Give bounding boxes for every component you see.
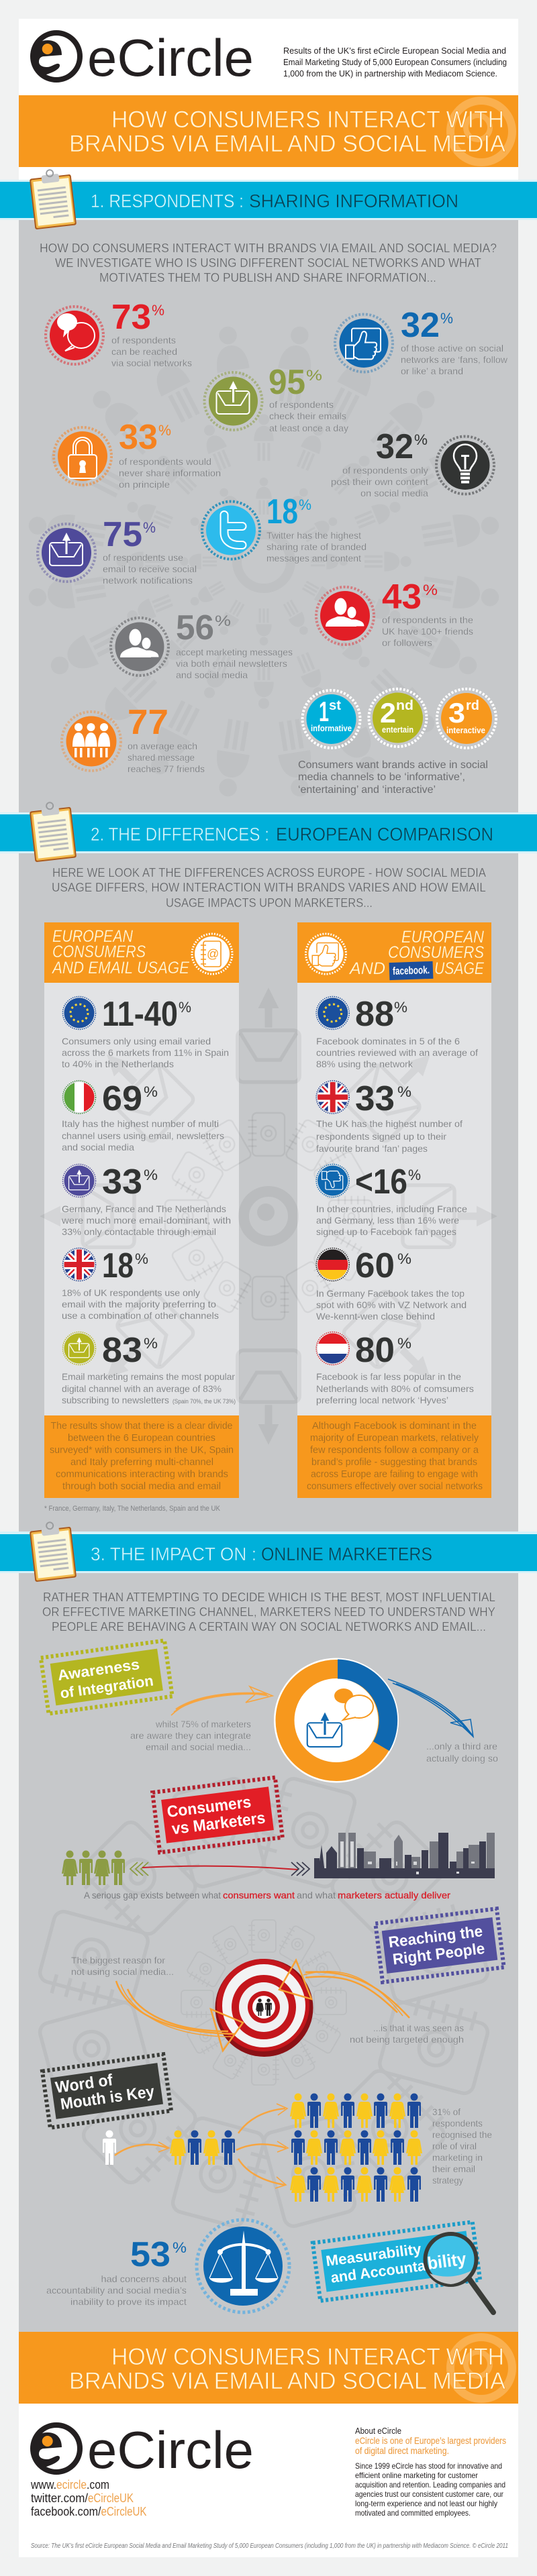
row: 88%	[316, 995, 478, 1069]
section band 3: impact	[0, 1520, 537, 1582]
ranking caption: Consumers want brands active in social	[298, 759, 488, 771]
conclusion box: email: and Italy preferring multi-channel	[70, 1456, 213, 1468]
row: 60% Germany: In Germany Facebook takes the top	[316, 1288, 465, 1299]
logo: eCircle	[87, 28, 254, 87]
title banner: HOW CONSUMERS INTERACT WITH	[111, 107, 504, 133]
target	[215, 1959, 313, 2057]
second-degree crowd row 3	[290, 2167, 421, 2202]
stat: 43% have 100+ friends: 43	[382, 578, 422, 616]
column header: email usage: EUROPEAN	[52, 927, 134, 946]
column header: facebook usage: CONSUMERS	[388, 943, 484, 962]
study description: Results of the UK’s first eCircle European Social Media and	[283, 46, 506, 56]
text: whilst 75% of marketers	[130, 1719, 251, 1752]
title banner: BRANDS VIA EMAIL AND SOCIAL MEDIA	[69, 131, 506, 157]
stat: 33% never share information: never share information	[119, 468, 221, 478]
row: 33% email only: Germany, France and The Netherlands	[62, 1203, 226, 1214]
arrows to wider groups	[236, 2104, 288, 2188]
conclusion box: facebook: Although Facebook is dominant in the	[312, 1420, 477, 1432]
row: 88%: %	[394, 999, 407, 1016]
row: 18% UK	[62, 1246, 219, 1321]
rank 3rd interactive: interactive	[446, 725, 485, 735]
gap arrow between consumers and marketers	[130, 1862, 309, 1876]
stat: 33% never share information: of respondents would	[119, 456, 211, 467]
web links	[30, 2478, 146, 2518]
arrow to first group	[115, 2142, 169, 2155]
stat: 56% accept marketing messages	[111, 608, 293, 680]
stat: 95% check email daily: at least once a day	[269, 423, 348, 433]
ranking caption: media channels to be ‘informative’,	[298, 771, 465, 783]
row: 80% Netherlands: preferring local network ‘Hyves’	[316, 1395, 448, 1405]
stat: 73% reachable via social networks: via social networks	[111, 358, 192, 368]
row: 69% Italy: %	[144, 1083, 158, 1100]
section band 3: impact: ONLINE MARKETERS	[261, 1544, 432, 1564]
section band 3: impact: 3. THE IMPACT ON :	[91, 1544, 256, 1564]
row: 33% UK: favourite brand ‘fan’ pages	[316, 1143, 428, 1154]
row: 11-40%: Consumers only using email varied	[62, 1036, 211, 1046]
panel: impact on online marketers	[19, 1573, 518, 2332]
row: 80% Netherlands: 80	[355, 1331, 395, 1370]
panel: differences, European comparison	[19, 853, 518, 1532]
stat: 95% check email daily: %	[306, 367, 322, 384]
web links: eCircleUK	[101, 2505, 146, 2518]
closing banner	[19, 2332, 518, 2404]
row: less than 16%	[316, 1163, 467, 1237]
rank 2nd entertain: nd	[396, 698, 413, 713]
row: 88%: Facebook dominates in 5 of the 6	[316, 1036, 460, 1046]
conclusion box: email	[44, 1415, 239, 1498]
row: 80% Netherlands: Facebook is far less popular in the	[316, 1371, 461, 1382]
web links: www.	[30, 2478, 56, 2491]
stat: 75% email notifications: network notifications	[103, 575, 193, 586]
row: 69% Italy: Italy has the highest number of multi	[62, 1118, 219, 1129]
stat: 56% accept marketing messages: via both email newsletters	[176, 658, 287, 669]
section band 1: respondents: 1. RESPONDENTS :	[91, 191, 244, 211]
intro text: WE INVESTIGATE WHO IS USING DIFFERENT SOCIAL NETWORKS AND WHAT	[55, 256, 481, 270]
first group	[170, 2131, 235, 2165]
stat: 75% email notifications: %	[143, 519, 156, 536]
icon: clipboard	[29, 168, 77, 229]
conclusion box: facebook: brand’s profile - suggesting that brands	[311, 1456, 477, 1468]
stat: 32% only post their own content	[331, 427, 494, 498]
tag: reaching the right people: Reaching the	[387, 1922, 483, 1951]
row: 60% Germany	[316, 1246, 467, 1322]
stat: 53% accountability concerns: had concerns about	[101, 2273, 187, 2284]
row: 33% email only	[61, 1163, 231, 1237]
consumers figures	[62, 1850, 125, 1885]
stat: 18% twitter sharing rate: %	[299, 496, 311, 513]
conclusion box: facebook: majority of European markets, relatively	[310, 1432, 479, 1444]
stat: 32% only post their own content: post their own content	[331, 476, 428, 487]
stat: 53% accountability concerns: %	[173, 2239, 187, 2256]
facebook badge: facebook.	[393, 965, 430, 977]
intro text	[52, 866, 486, 910]
about eCircle: Since 1999 eCircle has stood for innovative and	[355, 2461, 502, 2471]
stat: 77 friends reached: on average each	[128, 741, 197, 751]
stat: 95% check email daily: check their emails	[269, 411, 346, 421]
row: 11-40%	[62, 995, 229, 1069]
stat: 18% twitter sharing rate: 18	[266, 492, 298, 531]
title banner	[19, 95, 518, 167]
row: 83% newsletters: (Spain 70%, the UK 73%)	[173, 1398, 236, 1405]
row: 11-40%: across the 6 markets from 11% in Spain	[62, 1047, 229, 1058]
donut chart: 75% aware vs one third doing	[274, 1658, 399, 1783]
row: 60% Germany: spot with 60% with VZ Network and	[316, 1299, 467, 1310]
icon: scales of justice	[197, 2220, 289, 2312]
text: whilst 75% of marketers: are aware they can integrate	[130, 1730, 251, 1741]
row: 11-40%: %	[179, 999, 191, 1016]
facebook badge	[389, 961, 433, 980]
about eCircle: acquisition and retention. Leading companies and	[355, 2480, 505, 2489]
stat: 56% accept marketing messages: accept marketing messages	[176, 647, 293, 657]
row: 33% email only: were much more email-dominant, with	[61, 1215, 231, 1226]
gap text: consumers want	[223, 1890, 295, 1900]
icon: magnifying glass: bility	[426, 2249, 468, 2273]
text: 31% viral marketing: recognised the	[432, 2129, 492, 2140]
intro text: HOW DO CONSUMERS INTERACT WITH BRANDS VIA EMAIL AND SOCIAL MEDIA?	[40, 241, 497, 255]
tag: consumers vs marketers	[152, 1778, 283, 1852]
icon: magnifying glass	[426, 2234, 493, 2312]
intro text: OR EFFECTIVE MARKETING CHANNEL, MARKETERS NEED TO UNDERSTAND WHY	[42, 1605, 495, 1619]
study description: 1,000 from the UK) in partnership with Mediacom Science.	[283, 68, 497, 78]
text: not targeted: ...is that it was seen as	[373, 2023, 464, 2033]
panel: footer	[19, 2404, 518, 2557]
stat: 18% twitter sharing rate: sharing rate of branded	[266, 541, 367, 552]
rank 3rd interactive	[437, 689, 496, 748]
about eCircle: motivated and committed employees.	[355, 2508, 471, 2518]
stat: 75% email notifications: of respondents use	[103, 552, 183, 563]
tag: consumers vs marketers: vs Marketers	[170, 1809, 266, 1838]
column header: email usage: AND EMAIL USAGE	[51, 959, 189, 977]
about eCircle: long-term experience and not least our highly	[355, 2499, 497, 2508]
column header: email usage: @	[207, 947, 219, 961]
row: 33% UK	[316, 1079, 462, 1154]
text: 31% viral marketing: their email	[432, 2163, 475, 2174]
tag: reaching the right people: Right People	[391, 1939, 486, 1968]
viral marketing figures	[103, 2093, 422, 2202]
rank 2nd entertain: 2	[380, 697, 396, 729]
row: 88%: 88% using the network	[316, 1059, 413, 1069]
stat: 18% twitter sharing rate	[202, 492, 367, 564]
column header: email usage: CONSUMERS	[52, 943, 146, 961]
web links: .com	[87, 2478, 109, 2491]
icon: clipboard	[29, 1520, 77, 1582]
rank 1st informative: 1	[319, 696, 329, 727]
section band 2: differences	[0, 800, 537, 862]
row: 18% UK: %	[135, 1250, 148, 1267]
single person	[103, 2131, 116, 2165]
column header: email usage	[44, 922, 239, 983]
row: 80% Netherlands	[316, 1331, 474, 1405]
conclusion box: email: communications interacting with brands	[56, 1468, 228, 1480]
conclusion box: email: between the 6 European countries	[68, 1432, 215, 1444]
stat: 95% check email daily: 95	[268, 363, 305, 402]
section band 1: respondents	[0, 168, 537, 229]
arrow: right to target	[279, 1960, 409, 2018]
stat: 43% have 100+ friends	[316, 578, 473, 648]
stat: 53% accountability concerns	[46, 2235, 187, 2307]
text: 31% viral marketing: strategy	[432, 2175, 463, 2186]
column header: facebook usage: USAGE	[434, 959, 484, 978]
stat: 95% check email daily	[204, 363, 348, 433]
arrow: blue to only a third	[388, 1679, 473, 1737]
row: 33% UK: 33	[355, 1079, 395, 1118]
stat: 43% have 100+ friends: or followers	[382, 637, 432, 648]
stat: 73% reachable via social networks: can be reached	[111, 346, 177, 357]
tag: awareness of integration: of Integration	[59, 1672, 154, 1702]
web links: eCircleUK	[88, 2491, 134, 2505]
row: 80% Netherlands: %	[397, 1335, 411, 1352]
text: biggest reason: not using social media...	[71, 1966, 174, 1977]
stat: 73% reachable via social networks: %	[152, 302, 164, 319]
column header: facebook usage	[297, 922, 491, 983]
city skyline	[314, 1833, 495, 1878]
stat: 53% accountability concerns: inability to prove its impact	[70, 2296, 187, 2307]
about eCircle: efficient online marketing for customer	[355, 2471, 478, 2480]
gap text: and what	[297, 1890, 336, 1900]
row: 60% Germany: 60	[355, 1246, 395, 1285]
row: 18% UK: 18	[102, 1246, 134, 1285]
stat: 33% never share information	[54, 418, 221, 490]
about eCircle: About eCircle	[355, 2426, 401, 2436]
ranking: informative, entertain, interactive	[302, 689, 496, 748]
row: 60% Germany: %	[397, 1250, 411, 1267]
conclusion box: email: surveyed* with consumers in the UK, Spain	[50, 1444, 234, 1456]
text: whilst 75% of marketers: whilst 75% of marketers	[155, 1719, 251, 1729]
stat: 43% have 100+ friends: of respondents in the	[382, 614, 473, 625]
tag: word of mouth is key: Mouth is Key	[59, 2082, 156, 2114]
conclusion box: facebook: consumers effectively over social networks	[307, 1481, 483, 1492]
left column stats	[61, 995, 236, 1405]
row: 80% Netherlands: Netherlands with 80% of comsumers	[316, 1383, 474, 1394]
rank 1st informative: informative	[311, 723, 352, 733]
row: 69% Italy	[62, 1079, 224, 1152]
section band 2: differences: EUROPEAN COMPARISON	[276, 824, 493, 845]
row: 83% newsletters	[62, 1331, 236, 1405]
closing banner: HOW CONSUMERS INTERACT WITH	[111, 2344, 504, 2370]
stat: 75% email notifications	[38, 515, 197, 586]
text: only a third: ...only a third are	[426, 1741, 497, 1752]
tag: awareness of integration	[41, 1640, 173, 1714]
tag: consumers vs marketers: Consumers	[166, 1793, 252, 1821]
rank 1st informative: st	[329, 698, 341, 713]
stat: 56% accept marketing messages: %	[215, 612, 231, 629]
tag: measurability and accountability: Measurability	[325, 2241, 423, 2269]
figures in target	[256, 1998, 272, 2016]
ranking caption	[298, 759, 488, 796]
about eCircle: eCircle is one of Europe’s largest providers	[355, 2435, 506, 2446]
stat: 32% fans of a brand: of those active on social	[401, 343, 503, 354]
footnote: * France, Germany, Italy, The Netherlands, Spain and the UK	[44, 1505, 221, 1513]
row: 33% email only: 33% only contactable through email	[62, 1226, 216, 1237]
stat: 32% only post their own content: 32	[376, 427, 413, 466]
stat: 77 friends reached: shared message	[128, 752, 195, 763]
text: 31% viral marketing: 31% of	[432, 2106, 460, 2117]
panel: header	[19, 19, 518, 182]
column header: facebook usage: EUROPEAN	[401, 928, 485, 947]
icon: speech bubbles	[334, 1688, 373, 1720]
conclusion box: facebook	[297, 1415, 491, 1498]
stat: 75% email notifications: email to receive social	[103, 564, 197, 574]
right column stats	[316, 995, 478, 1405]
text: 31% viral marketing: marketing in	[432, 2152, 483, 2163]
row: 83% newsletters: digital channel with an average of 83%	[62, 1383, 222, 1394]
row: 18% UK: 18% of UK respondents use only	[62, 1287, 200, 1298]
stat: 56% accept marketing messages: 56	[176, 608, 214, 647]
row: less than 16%: %	[408, 1167, 421, 1183]
text: only a third	[426, 1741, 498, 1764]
row: 33% UK: The UK has the highest number of	[316, 1118, 462, 1129]
web links: facebook.com/	[31, 2505, 101, 2518]
stat: 73% reachable via social networks: of respondents	[111, 335, 176, 345]
stat: 32% only post their own content: of respondents only	[342, 465, 428, 476]
intro text: HERE WE LOOK AT THE DIFFERENCES ACROSS EUROPE - HOW SOCIAL MEDIA	[52, 866, 486, 879]
second-degree crowd row 1	[290, 2093, 421, 2128]
intro text: MOTIVATES THEM TO PUBLISH AND SHARE INFORMATION...	[99, 271, 436, 284]
stat: 75% email notifications: 75	[103, 515, 142, 554]
rank 2nd entertain: entertain	[382, 724, 413, 735]
stat: 53% accountability concerns: accountability and social media’s	[46, 2285, 187, 2296]
closing banner: BRANDS VIA EMAIL AND SOCIAL MEDIA	[69, 2368, 506, 2394]
stat: 18% twitter sharing rate: messages and content	[266, 553, 361, 564]
row: 83% newsletters: 83	[102, 1331, 142, 1370]
conclusion box: email: The results show that there is a clear divide	[51, 1420, 232, 1432]
stat: 32% fans of a brand: or like’ a brand	[401, 366, 463, 376]
row: 69% Italy: channel users using email, newsletters	[62, 1130, 224, 1141]
stat: 32% fans of a brand	[335, 306, 508, 376]
stat: 18% twitter sharing rate: Twitter has the highest	[266, 530, 361, 541]
row: 33% UK: %	[397, 1083, 411, 1100]
panel: respondents, sharing information	[19, 220, 518, 812]
icon: envelope	[307, 1712, 342, 1747]
row: 69% Italy: and social media	[62, 1142, 134, 1152]
row: 11-40%: 11-40	[102, 995, 178, 1034]
tag: word of mouth is key	[42, 2054, 171, 2128]
rank 2nd entertain	[369, 689, 427, 747]
row: 83% newsletters: %	[144, 1335, 158, 1352]
conclusion box: email: through both social media and email	[62, 1481, 221, 1492]
arrow: orange to donut	[171, 1686, 273, 1715]
text: not targeted	[350, 2023, 464, 2045]
row: 83% newsletters: subscribing to newsletters	[62, 1395, 169, 1405]
stat: 32% only post their own content: on social media	[360, 488, 428, 498]
stat: 32% fans of a brand: %	[440, 310, 453, 327]
intro text: USAGE DIFFERS, HOW INTERACTION WITH BRANDS VARIES AND HOW EMAIL	[52, 881, 486, 894]
icon: clipboard	[29, 800, 77, 862]
stat: 33% never share information: 33	[119, 418, 158, 457]
tag: awareness of integration: Awareness	[56, 1656, 141, 1684]
gap text: marketers actually deliver	[338, 1890, 450, 1900]
about eCircle: agencies trust our consistent customer care, our	[355, 2489, 503, 2499]
text: whilst 75% of marketers: email and social media...	[146, 1741, 251, 1752]
section band 1: respondents: SHARING INFORMATION	[249, 191, 458, 211]
row: 33% email only: 33	[102, 1163, 142, 1201]
intro text	[42, 1591, 495, 1633]
about eCircle: of digital direct marketing.	[355, 2445, 449, 2456]
rank 3rd interactive: rd	[466, 698, 479, 713]
tag: word of mouth is key: Word of	[54, 2071, 115, 2097]
tag: measurability and accountability: and Accounta	[330, 2257, 427, 2286]
stat: 56% accept marketing messages: and social media	[176, 669, 248, 680]
row: 33% UK: respondents signed up to their	[316, 1131, 446, 1142]
stat: 43% have 100+ friends: UK have 100+ friends	[382, 626, 473, 637]
stat: 33% never share information: on principle	[119, 479, 170, 490]
stat: 77 friends reached: reaches 77 friends	[128, 763, 205, 774]
stat: 32% fans of a brand: 32	[401, 306, 440, 345]
arrow: left to target	[116, 1981, 243, 2051]
row: less than 16%: signed up to Facebook fan pages	[316, 1226, 456, 1237]
stat: 95% check email daily: of respondents	[269, 399, 334, 410]
second-degree crowd row 2	[291, 2131, 422, 2165]
text: 31% viral marketing	[432, 2106, 492, 2186]
about eCircle	[355, 2426, 506, 2518]
row: 88%: countries reviewed with an average of	[316, 1047, 478, 1058]
gap text: A serious gap exists between what	[84, 1890, 221, 1900]
web links: ecircle	[56, 2478, 87, 2491]
ranking caption: ‘entertaining’ and ‘interactive’	[298, 784, 436, 796]
intro text: USAGE IMPACTS UPON MARKETERS...	[166, 896, 373, 910]
stat: 32% fans of a brand: networks are ‘fans, follow	[401, 354, 508, 365]
intro text: RATHER THAN ATTEMPTING TO DECIDE WHICH IS THE BEST, MOST INFLUENTIAL	[43, 1591, 495, 1604]
stat: 53% accountability concerns: 53	[130, 2235, 170, 2274]
stat: 73% reachable via social networks: 73	[111, 298, 151, 337]
intro text	[40, 241, 497, 284]
conclusion box: facebook: across Europe are failing to engage with	[311, 1468, 478, 1480]
study description: Email Marketing Study of 5,000 European Consumers (including	[283, 57, 507, 67]
intro text: PEOPLE ARE BEHAVING A CERTAIN WAY ON SOCIAL NETWORKS AND EMAIL...	[52, 1620, 486, 1633]
stat: 77 friends reached: 77	[128, 703, 168, 742]
stat: 77 friends reached	[62, 703, 205, 774]
rank 1st informative	[302, 690, 360, 748]
gap text	[84, 1890, 450, 1900]
text: 31% viral marketing: respondents	[432, 2118, 483, 2129]
rank 3rd interactive: 3	[448, 697, 465, 729]
row: 88%: 88	[355, 995, 394, 1034]
text: not targeted: not being targeted enough	[350, 2034, 464, 2045]
web links: twitter.com/	[31, 2491, 88, 2505]
tag: reaching the right people	[375, 1909, 504, 1982]
row: less than 16%: and Germany, less than 16% were	[316, 1215, 459, 1226]
text: only a third: actually doing so	[426, 1753, 498, 1764]
section band 2: differences: 2. THE DIFFERENCES :	[91, 824, 269, 845]
tag: measurability and accountability	[313, 2222, 493, 2312]
stat: 33% never share information: %	[158, 422, 171, 439]
text: biggest reason	[71, 1955, 174, 1977]
stat: 32% only post their own content: %	[414, 431, 428, 448]
row: 83% newsletters: Email marketing remains the most popular	[62, 1371, 235, 1382]
row: 60% Germany: We-kennt-wen close behind	[316, 1311, 435, 1322]
row: 11-40%: to 40% in the Netherlands	[62, 1059, 174, 1069]
row: 18% UK: use a combination of other channels	[62, 1310, 219, 1321]
row: 33% email only: %	[144, 1167, 158, 1183]
row: less than 16%: <16	[355, 1163, 407, 1201]
text: 31% viral marketing: role of viral	[432, 2141, 477, 2151]
row: less than 16%: In other countries, including France	[316, 1203, 467, 1214]
conclusion box: facebook: few respondents follow a company or a	[310, 1444, 479, 1456]
text: biggest reason: The biggest reason for	[71, 1955, 165, 1966]
row: 18% UK: email with the majority preferring to	[62, 1299, 216, 1309]
stat: 43% have 100+ friends: %	[423, 582, 438, 598]
footer logo: eCircle	[87, 2420, 254, 2479]
column header: facebook usage: AND	[348, 959, 385, 978]
column backgrounds	[44, 983, 491, 1415]
row: 69% Italy: 69	[102, 1079, 142, 1118]
stat: 73% reachable via social networks	[46, 298, 192, 368]
study description	[283, 46, 507, 78]
